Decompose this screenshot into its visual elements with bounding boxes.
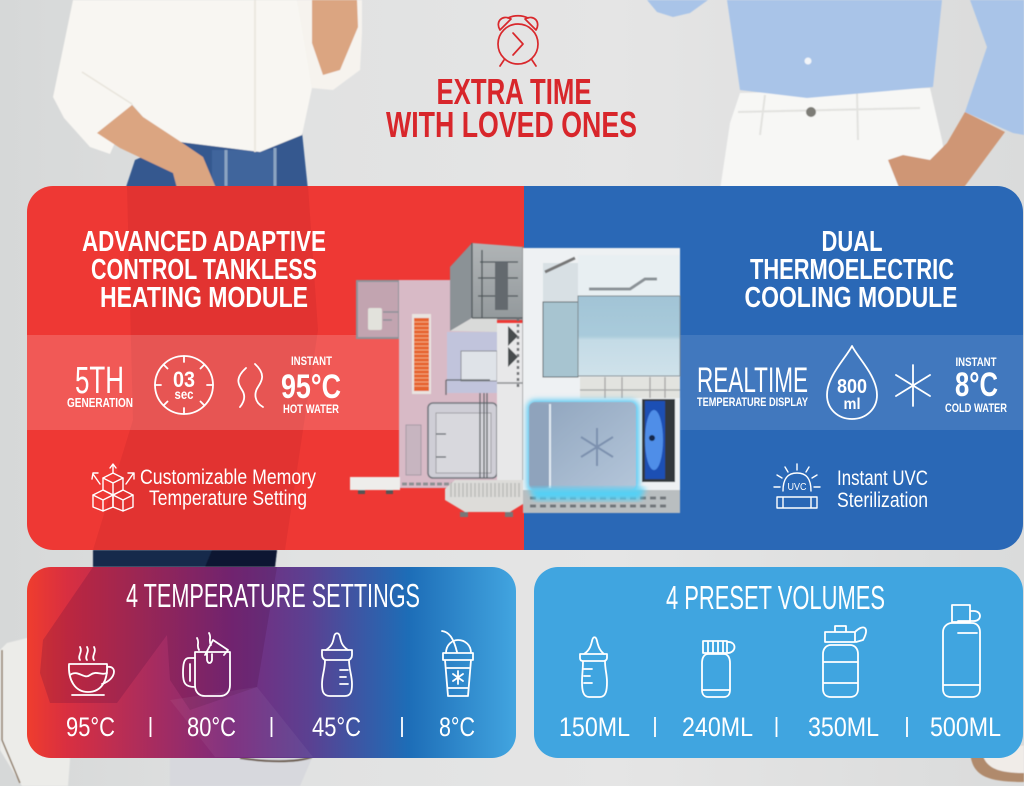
icon: 240ml bottle: [702, 641, 734, 697]
text: customizable memory: Temperature Setting: [149, 487, 307, 510]
heading: 4 TEMPERATURE SETTINGS: [126, 577, 420, 614]
heading: heating module: CONTROL TANKLESS: [91, 254, 317, 286]
heading: heating module: ADVANCED ADAPTIVE: [82, 226, 326, 258]
panel background: [27, 567, 516, 758]
icon: memory cubes with arrows: [92, 464, 134, 511]
water tank: [543, 255, 680, 398]
text: 5th generation: GENERATION: [67, 396, 133, 410]
heat sink left: [350, 477, 400, 494]
text: instant 95C hot water: HOT WATER: [283, 402, 339, 416]
title: [386, 71, 637, 145]
photo: legs and shoes at bottom: [0, 550, 1024, 786]
photo: man in blue shirt and white trousers: [647, 0, 1024, 190]
text: customizable memory: [140, 466, 316, 510]
icon: UVC lamp: [774, 464, 820, 508]
text: instant 8C cold water: COLD WATER: [945, 401, 1007, 415]
cooling block with snowflake: [527, 400, 639, 492]
values: [66, 712, 475, 742]
values: 80°C: [187, 712, 236, 742]
panel: heating side background: [27, 186, 524, 550]
icon: hot chocolate mug: [183, 633, 230, 696]
valve cube: [450, 243, 523, 332]
values: 150ML: [559, 712, 630, 742]
values: 500ML: [930, 712, 1001, 742]
text: 5th generation: 5TH: [75, 360, 124, 402]
panel: heating and cooling modules: [27, 186, 1023, 550]
heading: cooling module: [744, 226, 958, 314]
copper heating coil: [412, 314, 431, 394]
cooling housing: [523, 248, 680, 513]
panel: cooling side background: [524, 186, 1023, 550]
text: customizable memory: Customizable Memory: [140, 466, 316, 489]
icon: 500ml bottle: [943, 605, 980, 697]
text: real time display: TEMPERATURE DISPLAY: [697, 395, 808, 409]
heading: heating module: HEATING MODULE: [100, 282, 308, 314]
text: instant 95C hot water: [281, 354, 341, 416]
text: instant 8C cold water: 8°C: [955, 366, 998, 404]
heading: cooling module: DUAL: [822, 226, 882, 258]
icon: 800 ml water drop: 800: [837, 376, 867, 398]
icon: iced drink cup: [442, 631, 473, 696]
values: 45°C: [312, 712, 361, 742]
cooling fan: [642, 399, 675, 482]
text: instant 8C cold water: [945, 355, 1007, 415]
text: instant UVC sterilization: Instant UVC: [837, 467, 928, 490]
values: 8°C: [439, 712, 475, 742]
icon: steaming cup: [69, 647, 114, 695]
values: 350ML: [808, 712, 879, 742]
heat sink base: [445, 480, 523, 517]
centre column: [497, 246, 523, 488]
heating compartment: [357, 280, 497, 488]
text: instant 8C cold water: INSTANT: [956, 355, 997, 369]
text: instant 95C hot water: 95°C: [281, 368, 341, 406]
icon: 800 ml water drop: [827, 346, 877, 419]
values: 95°C: [66, 712, 115, 742]
icon: 3 second timer: [155, 356, 213, 414]
values: 240ML: [682, 712, 753, 742]
icon: 800 ml water drop: ml: [844, 396, 860, 413]
heading: 4 PRESET VOLUMES: [666, 579, 885, 616]
panel: 4 temperature settings: [27, 567, 516, 758]
text: instant 95C hot water: INSTANT: [291, 354, 333, 368]
title icon: alarm clock: [498, 16, 538, 66]
text: instant UVC sterilization: [837, 467, 928, 512]
base strip with blue glow: [523, 488, 680, 513]
heading: cooling module: COOLING MODULE: [744, 282, 958, 314]
panel: 4 preset volumes: [534, 567, 1023, 758]
values: [559, 712, 1001, 742]
icon: 350ml bottle: [823, 626, 866, 697]
text: real time display: [697, 361, 808, 409]
title: EXTRA TIME: [436, 71, 592, 112]
icon: UVC lamp: UVC: [788, 482, 806, 493]
icon: 3 second timer: 03: [173, 367, 195, 392]
title: WITH LOVED ONES: [386, 104, 637, 145]
illustration: water dispenser cutaway: [350, 243, 680, 517]
panel background: [534, 567, 1023, 758]
photo: woman in white shirt and jeans: [53, 0, 362, 190]
text: 5th generation: [67, 360, 133, 410]
text: real time display: REALTIME: [697, 361, 808, 400]
icon: heat waves: [238, 364, 263, 407]
icon: baby bottle: [322, 633, 352, 696]
heading: heating module: [82, 226, 326, 314]
text: instant UVC sterilization: Sterilization: [837, 489, 928, 512]
icon: snowflake: [896, 365, 930, 406]
icon: 150ml bottle: [580, 637, 607, 697]
heading: cooling module: THERMOELECTRIC: [750, 254, 954, 286]
icon: 3 second timer: sec: [174, 386, 194, 402]
